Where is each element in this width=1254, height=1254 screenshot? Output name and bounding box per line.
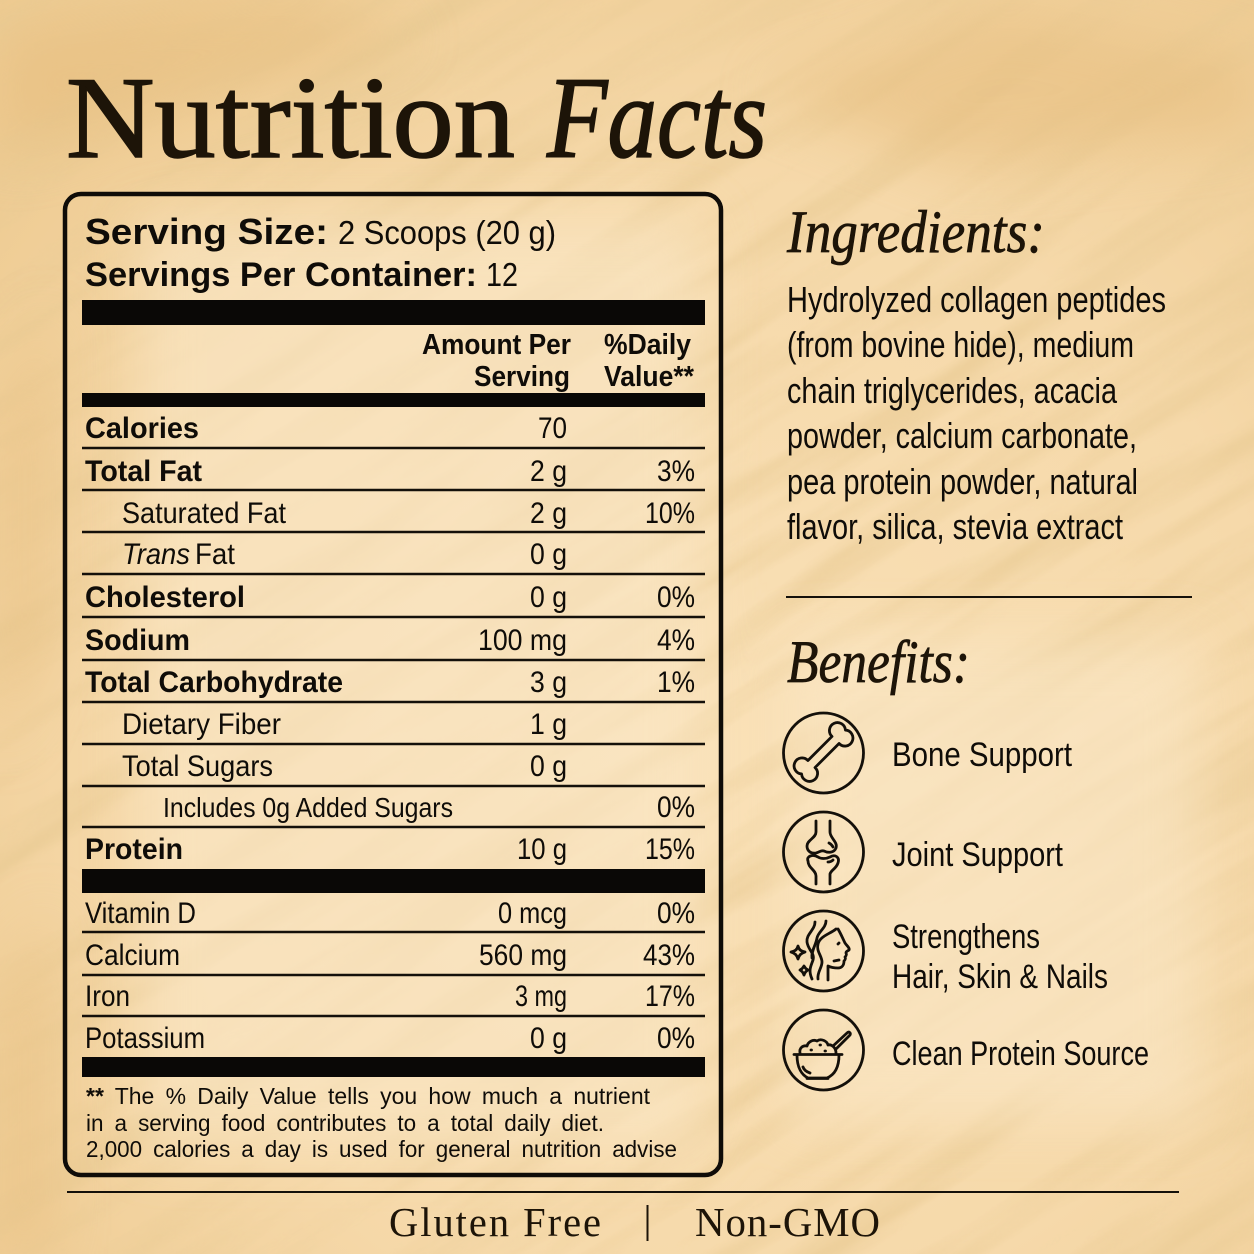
ingredients text: flavor, silica, stevia extract: [787, 506, 1123, 547]
nutrient rows: 2 g: [530, 455, 567, 488]
nutrient rows: Includes 0g Added Sugars: [163, 792, 453, 823]
nutrient rows: 15%: [645, 833, 695, 866]
nutrient rows: Protein: [85, 833, 183, 866]
nutrient rows: 10 g: [517, 833, 567, 866]
benefit: joint support: Joint Support: [892, 836, 1063, 874]
nutrient rows: Sodium: [85, 624, 190, 657]
nutrient rows: 0 g: [530, 750, 567, 783]
nutrient rows: [85, 412, 695, 1055]
nutrient rows: 0 g: [530, 538, 567, 571]
nutrient rows: 0%: [657, 791, 695, 824]
ingredients text: chain triglycerides, acacia: [787, 370, 1118, 411]
ingredients text: Hydrolyzed collagen peptides: [787, 279, 1166, 320]
title: Facts: [546, 54, 767, 183]
footer claims: Gluten Free: [389, 1199, 603, 1245]
nutrient rows: Saturated Fat: [122, 497, 287, 530]
footer claims: Non-GMO: [695, 1199, 881, 1245]
heading: benefits: Benefits:: [787, 629, 970, 695]
nutrient rows: Calcium: [85, 939, 180, 972]
footnote: 2,000 calories a day is used for general nutrition advise: [86, 1136, 677, 1162]
nutrient rows: Dietary Fiber: [122, 708, 281, 741]
nutrient rows: 17%: [645, 980, 695, 1013]
nutrient rows: Calories: [85, 412, 199, 445]
column headers: %Daily: [604, 329, 691, 361]
nutrient rows: Total Sugars: [122, 750, 273, 783]
column headers: [422, 329, 695, 393]
label: Hair, Skin & Nails: [892, 958, 1108, 996]
column headers: Value**: [604, 361, 695, 393]
nutrient rows: 0%: [657, 581, 695, 614]
serving info: Servings Per Container:: [85, 256, 477, 294]
ingredients text: pea protein powder, natural: [787, 461, 1138, 502]
nutrient rows: 0 g: [530, 1022, 567, 1055]
column headers: Serving: [474, 361, 570, 393]
icon: face and hair: [784, 911, 864, 991]
benefit: clean protein source: Clean Protein Source: [892, 1035, 1149, 1073]
nutrient rows: 0 g: [530, 581, 567, 614]
nutrient rows: Cholesterol: [85, 581, 245, 614]
nutrient rows: 0%: [657, 1022, 695, 1055]
thick rules: [82, 300, 705, 1077]
nutrient rows: 560 mg: [479, 939, 567, 972]
nutrient rows: 3 mg: [515, 980, 567, 1013]
title: [66, 54, 767, 183]
serving info: 12: [486, 256, 518, 293]
footer claims: [389, 1199, 881, 1245]
nutrient rows: 43%: [643, 939, 695, 972]
nutrient rows: 10%: [645, 497, 695, 530]
nutrient rows: Trans: [122, 538, 190, 571]
icon: bowl and spoon: [784, 1010, 864, 1090]
label: [892, 918, 1108, 996]
benefit: hair, skin and nails: [784, 911, 1108, 996]
footnote: in a serving food contributes to a total daily diet.: [86, 1110, 604, 1136]
footnote: ** The % Daily Value tells you how much a nutrient: [86, 1083, 650, 1109]
nutrient rows: Total Fat: [85, 455, 202, 488]
nutrient rows: 0 mcg: [498, 897, 567, 930]
serving info: [85, 211, 556, 294]
benefit: bone support: Bone Support: [892, 736, 1072, 774]
panel: nutrition facts label: [65, 194, 721, 1175]
footnote: [86, 1083, 677, 1162]
nutrient rows: Fat: [195, 538, 236, 571]
nutrient rows: 0%: [657, 897, 695, 930]
ingredients text: [787, 279, 1166, 547]
nutrient rows: 100 mg: [478, 624, 567, 657]
nutrient rows: Iron: [85, 980, 130, 1013]
nutrient rows: 4%: [657, 624, 695, 657]
serving info: Serving Size:: [85, 211, 328, 252]
icon: bone: [784, 713, 864, 793]
serving info: 2 Scoops (20 g): [338, 214, 556, 251]
nutrient rows: 70: [538, 412, 567, 445]
nutrient rows: 3%: [657, 455, 695, 488]
nutrient rows: 2 g: [530, 497, 567, 530]
column headers: Amount Per: [422, 329, 571, 361]
benefit: joint support: [784, 812, 1063, 892]
row dividers: [82, 448, 705, 1016]
benefit: bone support: [784, 713, 1072, 793]
nutrient rows: 3 g: [530, 666, 567, 699]
benefit: clean protein source: [784, 1010, 1149, 1090]
icon: joint: [784, 812, 864, 892]
nutrient rows: Potassium: [85, 1022, 205, 1055]
label: Strengthens: [892, 918, 1040, 956]
ingredients text: (from bovine hide), medium: [787, 324, 1134, 365]
nutrient rows: 1%: [657, 666, 695, 699]
heading: ingredients: Ingredients:: [786, 199, 1045, 265]
nutrient rows: Vitamin D: [85, 897, 196, 930]
nutrient rows: Total Carbohydrate: [85, 666, 343, 699]
nutrient rows: 1 g: [530, 708, 567, 741]
ingredients text: powder, calcium carbonate,: [787, 415, 1137, 456]
title: Nutrition: [66, 54, 515, 183]
